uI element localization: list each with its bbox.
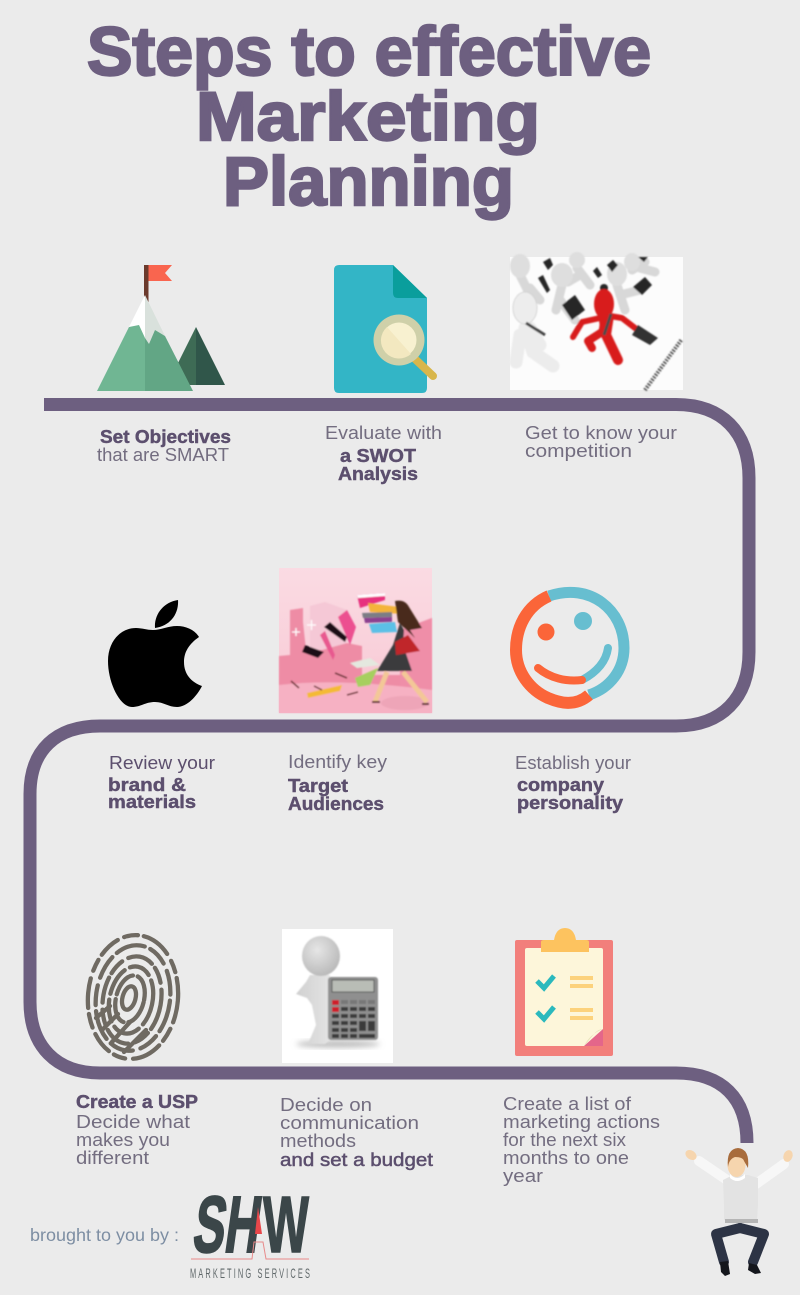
step 4 text: materials [108, 791, 196, 812]
image: figure leaning on calculator [282, 929, 393, 1063]
icon: fingerprint [83, 931, 183, 1063]
step 9 text [503, 1093, 660, 1186]
step 8 text [280, 1094, 433, 1170]
step 6 text [515, 752, 631, 813]
step 1 text [97, 426, 231, 465]
step 3 text: competition [525, 440, 632, 461]
brought to you by label: brought to you by : [30, 1225, 179, 1245]
step 6 text: company [517, 774, 605, 795]
step 9 text: marketing actions [503, 1111, 660, 1132]
step 2 text: Evaluate with [325, 422, 442, 443]
image: red figure leading the competition [510, 252, 683, 390]
step 7 text: Decide what [76, 1111, 190, 1132]
winding path line [30, 404, 749, 1143]
step 6 text: personality [517, 792, 624, 813]
step 7 text: different [76, 1147, 149, 1168]
step 3 text: Get to know your [525, 422, 677, 443]
step 4 text: Review your [109, 752, 215, 773]
step 7 text: Create a USP [76, 1091, 198, 1112]
step 9 text: for the next six [503, 1129, 627, 1150]
step 8 text: Decide on [280, 1094, 372, 1115]
icon: smiley face [516, 592, 624, 703]
icon: apple logo [108, 600, 202, 707]
step 6 text: Establish your [515, 752, 631, 773]
step 4 text: brand & [108, 774, 186, 795]
step 2 text [325, 422, 442, 484]
logo: Shaw Marketing Services: SH [189, 1180, 267, 1270]
icon: clipboard checklist [515, 928, 613, 1056]
title [87, 13, 651, 220]
step 2 text: a SWOT [340, 445, 417, 466]
step 9 text: months to one [503, 1147, 629, 1168]
icon: document with magnifier [334, 265, 433, 393]
step 5 text: Audiences [288, 793, 384, 814]
step 9 text: year [503, 1165, 543, 1186]
step 8 text: methods [280, 1130, 356, 1151]
step 5 text [288, 751, 388, 814]
logo: Shaw Marketing Services: W [263, 1180, 309, 1269]
title: Marketing [196, 78, 540, 155]
image: woman shopping with boxes [279, 568, 432, 713]
step 2 text: Analysis [338, 463, 418, 484]
step 8 text: and set a budget [280, 1149, 433, 1170]
step 4 text [108, 752, 215, 812]
step 7 text [76, 1091, 198, 1168]
figure: jumping man [684, 1148, 794, 1276]
step 9 text: Create a list of [503, 1093, 632, 1114]
title: Planning [223, 143, 514, 220]
title: Steps to effective [87, 13, 651, 90]
icon: mountain with flag [97, 265, 225, 391]
step 7 text: makes you [76, 1129, 170, 1150]
step 8 text: communication [280, 1112, 419, 1133]
step 5 text: Target [288, 775, 348, 796]
step 1 text: Set Objectives [100, 426, 231, 447]
step 3 text [525, 422, 677, 461]
step 5 text: Identify key [288, 751, 388, 772]
step 1 text: that are SMART [97, 444, 229, 465]
logo: Shaw Marketing Services: MARKETING SERVICES [190, 1267, 310, 1282]
